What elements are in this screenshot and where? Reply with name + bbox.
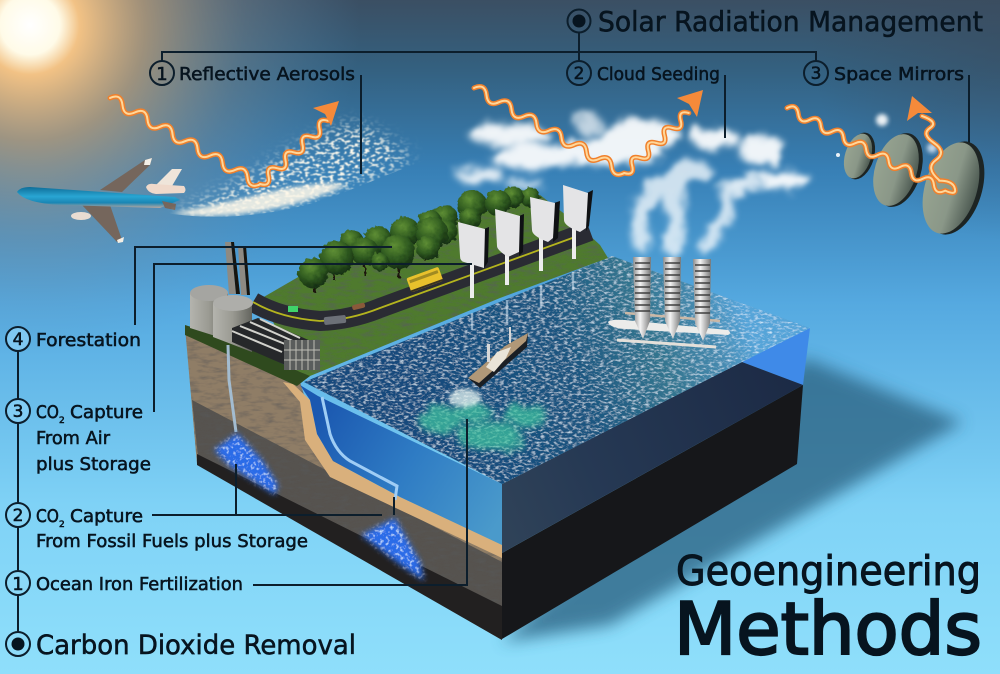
block: water left face bbox=[300, 385, 502, 545]
label: Forestation: 4 bbox=[13, 330, 23, 350]
label: Cloud Seeding: 2 bbox=[574, 64, 584, 84]
pipe: ocean CO2 bbox=[322, 397, 397, 500]
iron fertilization bloom bbox=[418, 404, 547, 452]
vehicles bbox=[288, 267, 443, 325]
label: Reflective Aerosols: Reflective Aerosols bbox=[179, 64, 355, 85]
arrow: reflected sunlight at clouds bbox=[474, 86, 703, 175]
label: CO2 Capture From Air plus Storage: 2 bbox=[59, 416, 65, 426]
label: Ocean Iron Fertilization: Ocean Iron Fertilization bbox=[36, 574, 243, 595]
steam plumes bbox=[640, 168, 755, 246]
road bbox=[253, 231, 590, 321]
heading: Solar Radiation Management: Solar Radiation Management bbox=[598, 5, 983, 38]
label: CO2 Capture From Air plus Storage: plus Storage bbox=[36, 454, 151, 475]
label: CO2 Capture From Fossil Fuels plus Storage: 2 bbox=[59, 520, 65, 530]
block: navy side bbox=[502, 362, 803, 553]
label: CO2 Capture From Fossil Fuels plus Storage: From Fossil Fuels plus Storage bbox=[36, 531, 308, 552]
label: Forestation bbox=[6, 327, 141, 351]
label: CO2 Capture From Air plus Storage: Capture bbox=[70, 402, 143, 423]
icon: airplane bbox=[17, 158, 186, 243]
label: CO2 Capture From Air plus Storage: 3 bbox=[13, 402, 23, 422]
power plant: silos bbox=[190, 285, 253, 352]
arrow: reflected sunlight at mirrors bbox=[787, 96, 955, 193]
label: Ocean Iron Fertilization: 1 bbox=[12, 574, 24, 595]
block: glass water corner bbox=[742, 328, 810, 385]
label: CO2 Capture From Fossil Fuels plus Storage: Capture bbox=[70, 506, 143, 527]
title: Geoengineering Methods: Geoengineering bbox=[676, 547, 981, 595]
label: Cloud Seeding bbox=[567, 61, 720, 85]
power plant: chimneys bbox=[225, 242, 250, 295]
top heading connector lines bbox=[162, 32, 969, 174]
label: CO2 Capture From Fossil Fuels plus Storage bbox=[6, 503, 308, 552]
title: Geoengineering Methods: Methods bbox=[674, 587, 982, 671]
block shadow bbox=[502, 358, 963, 642]
label: Cloud Seeding: Cloud Seeding bbox=[597, 64, 720, 85]
label: Space Mirrors bbox=[804, 61, 964, 85]
arrow: reflected sunlight at aerosols bbox=[110, 97, 339, 186]
left connector lines bbox=[18, 247, 472, 643]
label: Forestation: Forestation bbox=[36, 330, 141, 351]
CO2 storage deposit right bbox=[361, 518, 424, 581]
label: CO2 Capture From Fossil Fuels plus Storage: 2 bbox=[13, 506, 23, 526]
clouds bbox=[456, 112, 811, 191]
label: Space Mirrors: 3 bbox=[811, 64, 821, 84]
label: Space Mirrors: Space Mirrors bbox=[834, 64, 964, 85]
icon: space mirrors bbox=[836, 114, 995, 242]
billboards bbox=[458, 185, 593, 298]
trees: forestation bbox=[298, 186, 540, 292]
block: right black base bbox=[502, 385, 803, 639]
heading: Carbon Dioxide Removal: Carbon Dioxide Removal bbox=[36, 630, 356, 661]
title: Geoengineering Methods bbox=[674, 547, 982, 671]
block: soil left face bbox=[185, 327, 502, 640]
label: CO2 Capture From Air plus Storage: From Air bbox=[36, 428, 111, 449]
label: CO2 Capture From Air plus Storage bbox=[6, 399, 151, 475]
pole reflections bbox=[472, 272, 573, 330]
aerosol spray bbox=[172, 125, 412, 216]
label: CO2 Capture From Air plus Storage: CO bbox=[36, 402, 59, 423]
land: grass bbox=[262, 195, 608, 380]
label: CO2 Capture From Fossil Fuels plus Storage: CO bbox=[36, 506, 59, 527]
wake foam bbox=[449, 389, 481, 407]
CO2 storage deposit left bbox=[214, 433, 278, 495]
power plant: building bbox=[232, 318, 320, 370]
block: ocean surface bbox=[304, 256, 810, 484]
pipe: CO2 from plant into ground bbox=[228, 345, 236, 432]
ship bbox=[468, 327, 528, 388]
ocean screw towers bbox=[608, 257, 730, 347]
land: front grass edge bbox=[185, 325, 310, 386]
label: Reflective Aerosols: 1 bbox=[156, 64, 168, 85]
